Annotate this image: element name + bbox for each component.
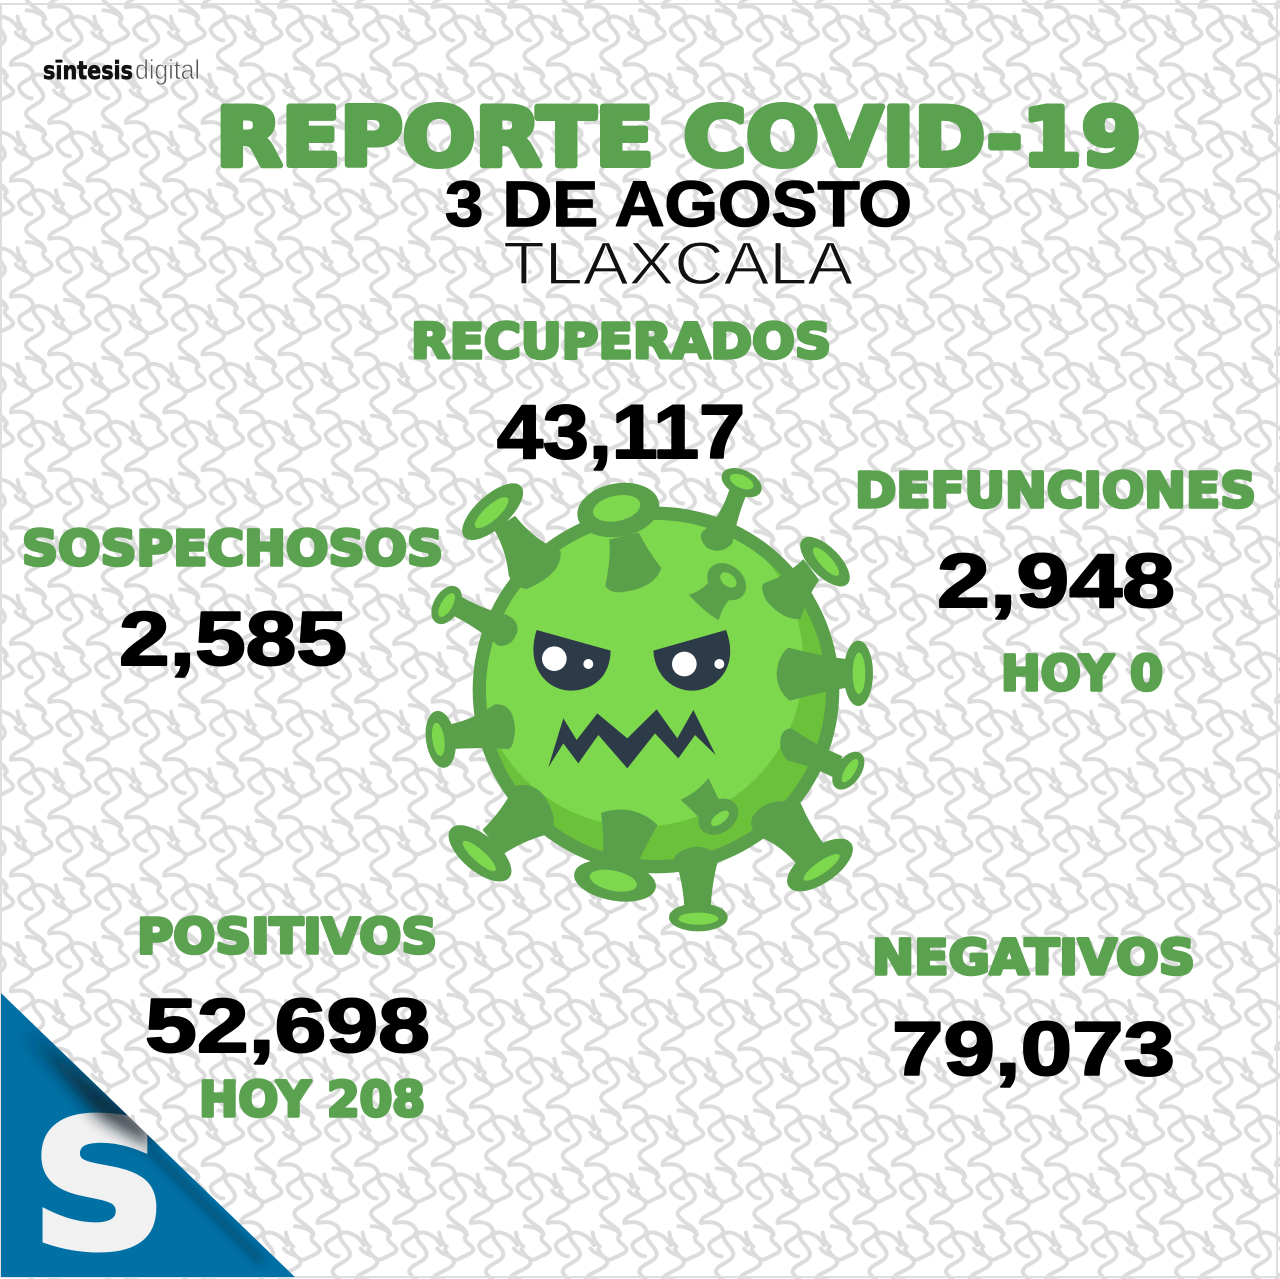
stat: sospechosos: 2,585: [119, 597, 347, 682]
stat: defunciones: DEFUNCIONES: [855, 463, 1256, 519]
stat: negativos: 79,073: [892, 1007, 1175, 1092]
stat: positivos: POSITIVOS: [137, 909, 437, 965]
virus mouth: [548, 709, 716, 768]
stat: negativos: NEGATIVOS: [872, 930, 1195, 986]
corner badge: blue triangle with S: [1, 993, 295, 1279]
icon: angry virus: [423, 463, 872, 931]
state name: TLAXCALA: [503, 230, 853, 297]
logo: sintesis digital: sīntesis: [43, 56, 133, 85]
stat: recuperados: RECUPERADOS: [411, 314, 831, 370]
stat: recuperados: 43,117: [497, 390, 745, 475]
stat: positivos: HOY 208: [199, 1072, 425, 1128]
virus eyes: [533, 630, 730, 691]
date: 3 DE AGOSTO: [445, 168, 912, 240]
title: REPORTE COVID-19: [216, 91, 1141, 184]
spike tips: [430, 471, 865, 925]
stat: defunciones: 2,948: [937, 539, 1175, 624]
stat: sospechosos: SOSPECHOSOS: [22, 521, 443, 577]
stat: recuperados: [411, 314, 831, 475]
stat: negativos: [872, 930, 1195, 1092]
stat: defunciones: HOY 0: [1001, 646, 1163, 702]
virus body: [473, 500, 839, 873]
stat: positivos: 52,698: [145, 984, 430, 1069]
stat: defunciones: [855, 463, 1256, 702]
stat: sospechosos: [22, 521, 443, 682]
logo: sintesis digital: [43, 54, 200, 85]
stat: positivos: [137, 909, 437, 1128]
virus spikes: [423, 463, 872, 931]
logo: sintesis digital: digital: [135, 54, 200, 85]
